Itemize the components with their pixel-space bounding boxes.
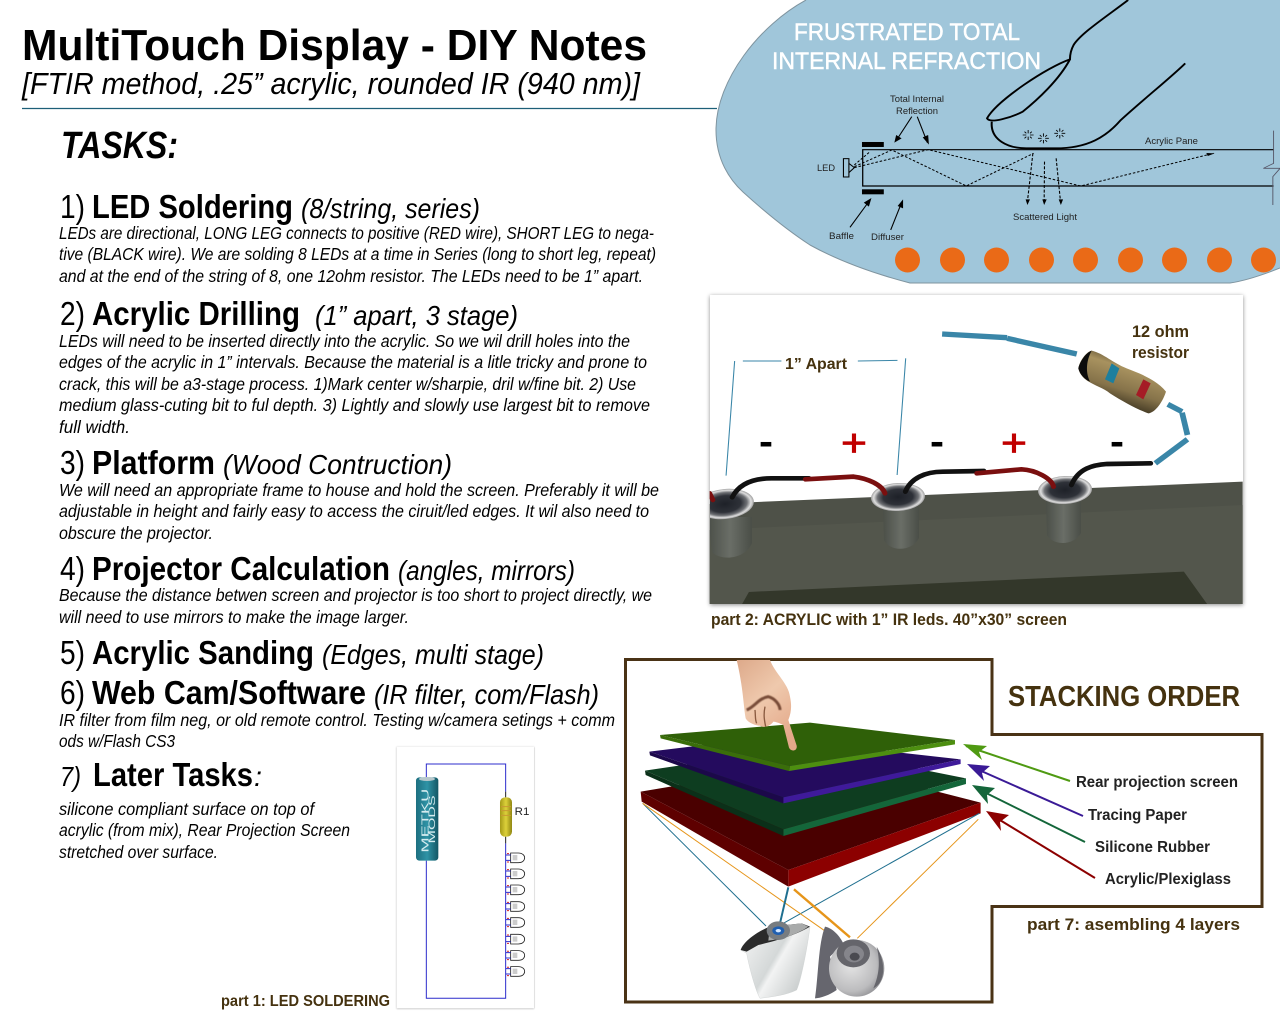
task 7: later tasks: Later Tasks [93,756,253,793]
icon: resistor R1 [500,792,529,843]
label: 12 ohm resistor: resistor [1132,343,1189,362]
task 4: projector calculation: will need to use mirrors to make the image larger. [59,607,409,627]
task 2: acrylic drilling: 2) [60,295,85,332]
icon: projector [741,921,810,998]
label: one inch apart: 1” Apart [785,356,848,373]
diagram labels: Scattered Light [1013,212,1078,222]
arrows to layer labels [963,744,1095,878]
task 3: platform: adjustable in height and fairly easy to access the ciruit/led edges. It wil also need to [59,501,649,521]
panel: LED circuit diagram [397,747,534,1008]
task 1: LED soldering: 1) [60,188,85,225]
diagram title: FRUSTRATED TOTAL [794,19,1020,46]
panel: acrylic with IR LEDs render [695,295,1243,604]
diagram labels: Diffuser [871,232,904,242]
task 1: LED soldering: and at the end of the string of 8, one 12ohm resistor. The LEDs need to be 1” apart. [59,266,643,286]
icon: battery: METKU [420,789,431,853]
hand pointing [737,660,797,751]
task 5: acrylic sanding: Acrylic Sanding [92,634,314,671]
polarity markers [759,421,1124,465]
task 4: projector calculation: Because the distance betwen screen and projector is too short to project directly, we [59,585,652,605]
diagram labels: Acrylic Pane [1145,136,1198,146]
orange LED dots [895,248,1276,272]
task 4: projector calculation: (angles, mirrors) [398,555,575,586]
task 3: platform: 3) [60,444,85,481]
caption: part 2: part 2: ACRYLIC with 1” IR leds. 40”x30” screen [711,611,1067,629]
task 7: later tasks: acrylic (from mix), Rear Projection Screen [59,820,350,840]
task 7: later tasks: stretched over surface. [59,842,218,862]
task 7: later tasks: 7) [60,761,81,792]
task 1: LED soldering: tive (BLACK wire). We are solding 8 LEDs at a time in Series (long to short leg, repeat) [59,244,656,264]
layer labels: Silicone Rubber [1095,839,1210,856]
task 2: acrylic drilling: medium glass-cuting bit to ful depth. 3) Lightly and slowly use largest bit to remove [59,395,650,415]
polarity markers: + [1001,423,1027,465]
silicone layer [645,747,966,836]
task 7: later tasks [59,756,350,862]
task 5: acrylic sanding [60,634,544,671]
icon: LED string [506,853,525,976]
arrow: tracing paper [967,764,1083,816]
arrow: rear projection [963,744,1070,781]
polarity markers: - [930,421,944,463]
task 3: platform: Platform [92,444,215,481]
task 3: platform [59,444,659,543]
tasks heading: TASKS: [61,125,178,167]
task 7: later tasks: : [254,761,262,792]
task 6: web cam and software [59,674,615,751]
subtitle: [FTIR method, .25” acrylic, rounded IR (940 nm)] [21,66,641,101]
task 7: later tasks: silicone compliant surface on top of [59,799,316,819]
diagram labels: Total Internal [890,94,944,104]
circuit wiring [426,764,506,998]
icon: battery: MODS [427,795,437,843]
finger and acrylic pane line art [843,0,1280,230]
icon: web camera [815,927,884,998]
task 1: LED soldering: LED Soldering [92,188,293,225]
task 2: acrylic drilling: crack, this will be a3-stage process. 1)Mark center w/sharpie, dril w/fine bit. 2) Use [59,374,636,394]
rear projection layer [660,723,955,771]
projection lines [643,803,979,943]
stacked layers illustration [641,723,981,943]
task 1: LED soldering [59,188,656,286]
diagram labels: Baffle [829,231,854,241]
header rule [22,108,717,110]
task 1: LED soldering: LEDs are directional, LONG LEG connects to positive (RED wire), SHORT LEG to nega- [59,223,654,243]
diagram title [772,19,1041,75]
title: MultiTouch Display - DIY Notes [22,21,647,70]
icon: resistor [1078,351,1166,413]
blue background shape [716,0,1280,283]
polarity markers: + [841,423,867,465]
task 5: acrylic sanding: 5) [60,634,85,671]
arrow: acrylic [986,811,1095,878]
icon: battery [416,777,438,861]
label: 12 ohm resistor: 12 ohm [1132,322,1189,341]
wires [710,334,1187,500]
task 3: platform: obscure the projector. [59,523,213,543]
layer labels [1076,774,1238,888]
task 6: web cam and software: ods w/Flash CS3 [59,731,175,751]
task 1: LED soldering: (8/string, series) [301,193,480,224]
panel edge shading [716,0,1280,283]
task 6: web cam and software: (IR filter, com/Flash) [374,679,599,710]
task 3: platform: (Wood Contruction) [223,449,452,480]
task 5: acrylic sanding: (Edges, multi stage) [322,639,544,670]
polarity markers: - [1110,421,1124,463]
task 6: web cam and software: IR filter from film neg, or old remote control. Testing w/camera setings + comm [59,710,615,730]
diagram labels [817,94,1198,242]
caption: part 1: part 1: LED SOLDERING [221,993,390,1010]
panel: stacking order frame [626,660,1262,1002]
task 4: projector calculation [59,550,652,627]
task 2: acrylic drilling: Acrylic Drilling [92,295,300,332]
LED mounts [695,475,1093,558]
layer labels: Rear projection screen [1076,774,1238,791]
arrow: silicone [972,785,1085,842]
polarity markers: - [759,421,773,463]
task 4: projector calculation: Projector Calculation [92,550,390,587]
task 3: platform: We will need an appropriate frame to house and hold the screen. Preferably it will be [59,480,659,500]
task 2: acrylic drilling: (1” apart, 3 stage) [315,300,518,331]
task 6: web cam and software: 6) [60,674,85,711]
diagram labels: Reflection [896,106,938,116]
task 2: acrylic drilling [59,295,650,437]
label: 12 ohm resistor [1132,322,1189,362]
layer labels: Tracing Paper [1088,807,1187,824]
diagram labels: LED [817,163,836,173]
heading: stacking order: STACKING ORDER [1008,681,1240,713]
icon: resistor R1: R1 [515,806,529,818]
caption: part 7: part 7: asembling 4 layers [1027,915,1240,934]
diagram title: INTERNAL REFRACTION [772,48,1041,75]
panel: frustrated total internal refraction diagram [716,0,1280,283]
task 2: acrylic drilling: full width. [59,417,130,437]
tracing paper layer [649,738,961,803]
one inch spacing bracket [726,358,906,476]
acrylic layer [641,762,981,887]
acrylic edge [710,482,1243,604]
blue wire to resistor [942,334,1187,463]
task 2: acrylic drilling: LEDs will need to be inserted directly into the acrylic. So we wil drill holes into the [59,331,630,351]
task 4: projector calculation: 4) [60,550,85,587]
task 2: acrylic drilling: edges of the acrylic in 1” intervals. Because the material is a litle tricky and prone to [59,352,647,372]
task 6: web cam and software: Web Cam/Software [92,674,366,711]
layer labels: Acrylic/Plexiglass [1105,871,1231,888]
